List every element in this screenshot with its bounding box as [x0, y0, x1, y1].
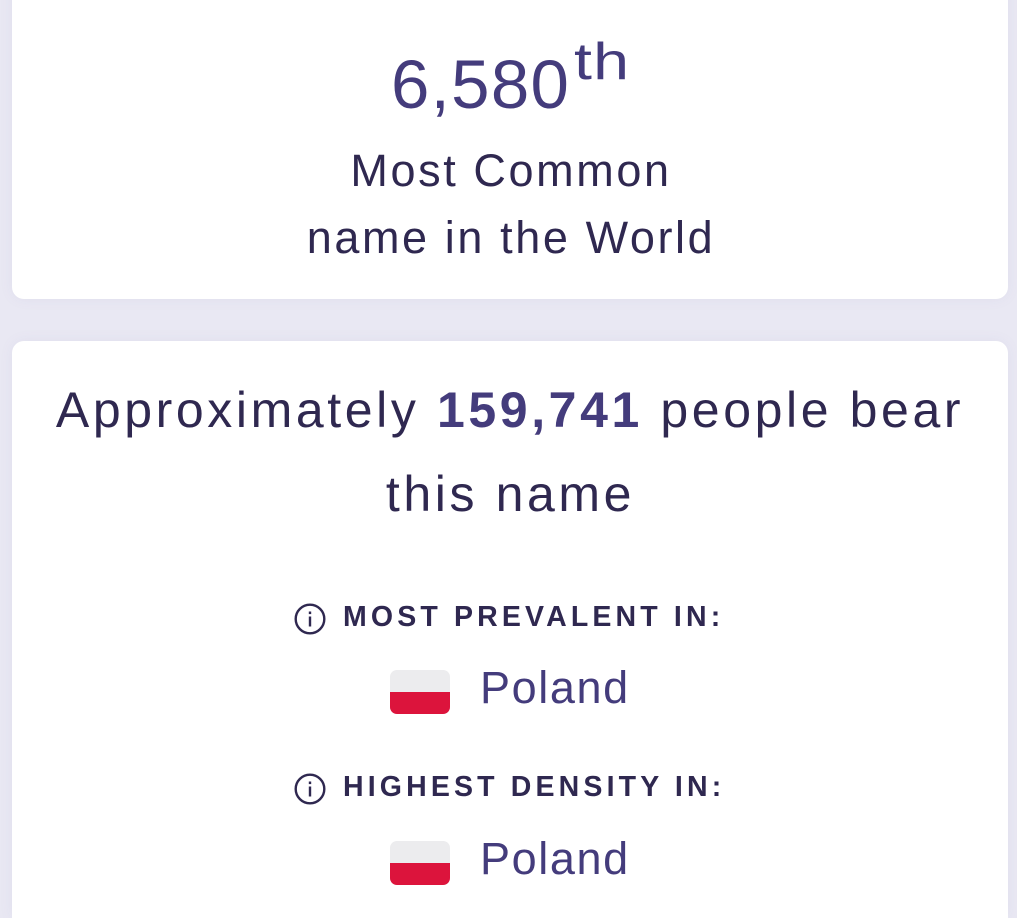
panel: world rank: [12, 0, 1008, 299]
rank ordinal suffix: th: [574, 33, 630, 91]
most prevalent label: MOST PREVALENT IN:: [343, 601, 724, 633]
panel: name statistics: [12, 341, 1008, 918]
people count sentence line 2: this name: [386, 466, 635, 522]
icon: info highest density: [294, 774, 326, 804]
rank number: 6,580: [391, 46, 570, 123]
rank caption line 1: Most Common: [350, 145, 672, 196]
most prevalent country: Poland: [480, 662, 630, 713]
highest density country: Poland: [480, 833, 630, 884]
flag: Poland highest density: [390, 841, 450, 885]
icon: info most prevalent: [294, 604, 326, 634]
flag: Poland most prevalent: [390, 670, 450, 714]
rank caption line 2: name in the World: [307, 212, 715, 263]
highest density label: HIGHEST DENSITY IN:: [343, 771, 725, 803]
people count sentence line 1: Approximately 159,741 people bear: [56, 382, 964, 438]
